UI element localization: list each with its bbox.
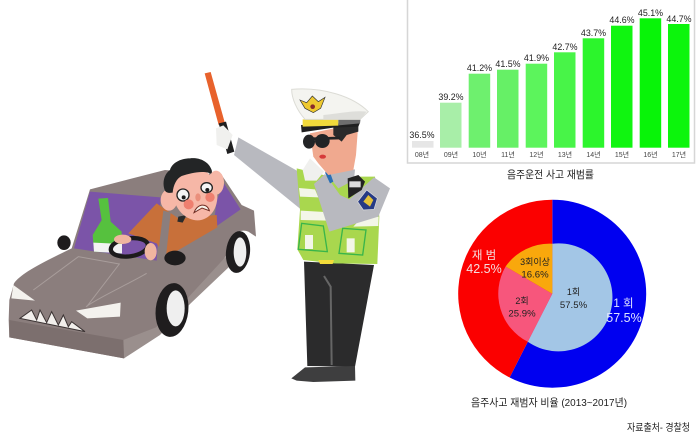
source note: 자료출처- 경찰청 xyxy=(627,421,690,434)
vest stripes xyxy=(299,188,379,227)
inner ring xyxy=(498,243,612,351)
inner labels: 3회이상 xyxy=(520,257,550,267)
a-pillar xyxy=(157,211,171,261)
bar value labels: 44.7% xyxy=(666,14,692,24)
car side sill xyxy=(123,255,230,358)
inner labels: 2회 xyxy=(515,296,529,306)
year labels xyxy=(415,150,686,159)
driver arm and torso xyxy=(128,203,217,257)
belt buckle xyxy=(318,260,334,264)
outer ring xyxy=(458,200,646,388)
cheeks xyxy=(184,199,194,209)
bar value labels: 44.6% xyxy=(609,15,635,25)
illustration: police officer xyxy=(205,72,390,382)
year labels: 13년 xyxy=(558,150,572,159)
vest pockets xyxy=(298,223,366,255)
driver hands xyxy=(114,235,157,260)
raised arm xyxy=(234,137,302,210)
bar value labels: 43.7% xyxy=(581,28,606,38)
car front wheel xyxy=(153,281,191,339)
driver head xyxy=(161,158,224,225)
bar value labels: 45.1% xyxy=(638,8,663,18)
mouth xyxy=(319,155,326,159)
bottle xyxy=(93,198,122,253)
bar value labels xyxy=(409,8,692,140)
side window xyxy=(213,183,241,228)
year labels: 08년 xyxy=(415,150,429,159)
headlights xyxy=(11,285,121,318)
outer labels xyxy=(466,249,502,276)
year labels: 14년 xyxy=(586,150,601,159)
tie xyxy=(325,171,333,183)
bar value labels: 42.7% xyxy=(552,42,578,52)
car rear wheel xyxy=(224,230,252,274)
donut chart: recidivist share: 57.5% xyxy=(606,311,642,325)
bent sleeve xyxy=(314,174,390,232)
year labels: 12년 xyxy=(529,150,544,159)
outer labels: 42.5% xyxy=(466,262,502,276)
year labels: 15년 xyxy=(615,150,629,159)
inner labels xyxy=(508,257,588,320)
cap xyxy=(292,89,368,132)
bar value labels: 36.5% xyxy=(409,130,435,140)
vest xyxy=(297,168,379,264)
inner labels: 57.5% xyxy=(560,300,588,311)
windshield xyxy=(74,192,161,261)
eyes xyxy=(177,189,189,201)
bar value labels: 41.5% xyxy=(495,59,521,69)
bar chart caption: 음주운전 사고 재범률 xyxy=(507,169,594,181)
steering wheel xyxy=(110,236,149,259)
whistle glove xyxy=(303,158,324,181)
radio xyxy=(348,175,365,198)
year labels: 10년 xyxy=(472,150,487,159)
trousers xyxy=(304,262,374,367)
front bumper xyxy=(9,320,124,358)
donut chart: recidivist share: 1 회 xyxy=(613,297,634,310)
hood lines xyxy=(33,257,147,307)
side mirrors xyxy=(57,235,186,265)
bar chart: recidivism rate xyxy=(408,0,694,163)
chart frame xyxy=(408,0,694,163)
baton handle xyxy=(219,122,234,154)
year labels: 16년 xyxy=(643,150,658,159)
head xyxy=(310,123,358,175)
shirt collar xyxy=(325,169,355,188)
grille teeth xyxy=(20,310,85,332)
bar value labels: 41.2% xyxy=(467,63,492,73)
outer labels: 재 범 xyxy=(472,249,496,262)
hair xyxy=(333,123,358,142)
sunglasses xyxy=(303,134,340,149)
baton xyxy=(205,72,225,125)
mouth xyxy=(194,205,209,213)
year labels: 17년 xyxy=(672,150,686,159)
year labels: 11년 xyxy=(501,150,515,159)
shoes xyxy=(291,366,355,382)
donut chart: recidivist share xyxy=(458,200,646,388)
trouser crease xyxy=(324,276,332,365)
bar value labels: 39.2% xyxy=(438,92,464,102)
pocket reflective strips xyxy=(305,235,355,252)
inner labels: 25.9% xyxy=(508,308,536,320)
shoulder patch xyxy=(358,190,377,210)
hair xyxy=(164,158,212,193)
bar value labels: 41.9% xyxy=(524,53,549,63)
inner labels: 1회 xyxy=(567,287,580,297)
bars xyxy=(412,18,690,148)
illustration: drunk driver in car xyxy=(9,158,256,358)
year labels: 09년 xyxy=(444,150,458,159)
raised glove xyxy=(216,125,233,149)
donut chart caption: 음주사고 재범자 비율 (2013~2017년) xyxy=(471,397,627,409)
car body xyxy=(9,170,256,358)
inner labels: 16.6% xyxy=(521,270,549,280)
